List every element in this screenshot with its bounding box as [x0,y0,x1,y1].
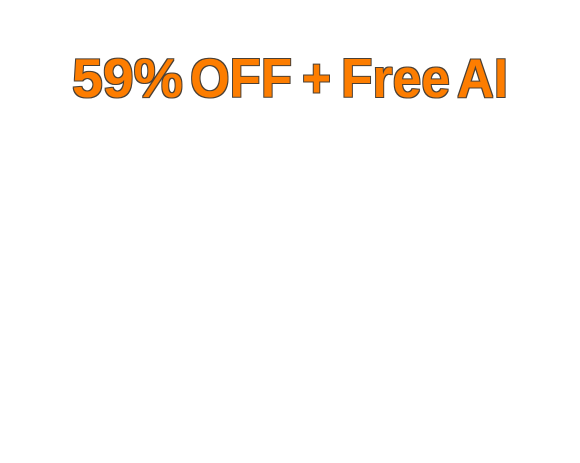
title: + [302,47,331,109]
title: 59% [72,47,183,109]
title: AI [457,47,508,109]
title [72,47,508,109]
title: OFF [190,47,292,109]
title: Free [341,47,450,109]
